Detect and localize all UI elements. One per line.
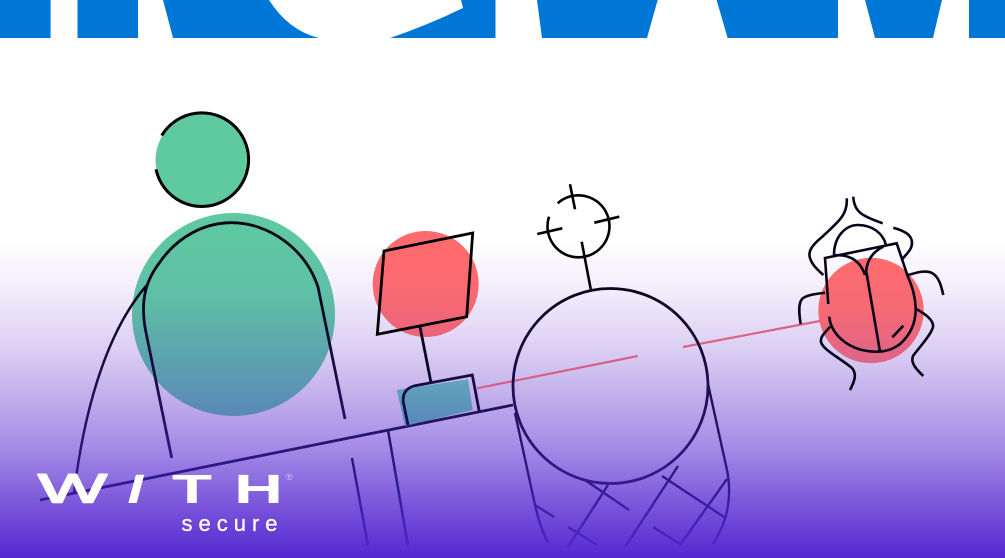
person figure	[74, 113, 408, 546]
shoulder and torso outline	[143, 223, 345, 458]
pink target line right	[683, 321, 820, 347]
lower torso lines	[352, 430, 408, 546]
body circle	[132, 213, 335, 416]
bug red circle	[818, 258, 924, 363]
red circle	[373, 231, 479, 337]
large circle	[513, 288, 708, 484]
logo letters	[38, 466, 283, 512]
bug icon	[799, 197, 943, 390]
teal fill	[397, 379, 473, 426]
tilted ground line	[40, 405, 513, 500]
base outline	[403, 375, 479, 425]
logo letters: I	[122, 466, 151, 512]
logo: WITH secure	[38, 466, 293, 536]
stem	[420, 327, 431, 383]
pink target line left	[477, 356, 638, 388]
teal base block	[397, 375, 479, 426]
registered mark: ®	[286, 472, 293, 482]
logo letters: H	[234, 466, 283, 512]
tilted square	[377, 233, 473, 334]
red circle with tilted square	[373, 231, 479, 383]
head outline	[156, 113, 249, 206]
top blue band with cropped lettering	[0, 0, 1005, 38]
arm curve	[74, 285, 147, 493]
net below circle	[515, 384, 729, 547]
logo letters: W	[38, 466, 108, 512]
crosshair	[537, 184, 619, 289]
logo letters: T	[172, 466, 212, 512]
secure wordmark: secure	[182, 511, 284, 536]
head circle	[156, 114, 248, 206]
